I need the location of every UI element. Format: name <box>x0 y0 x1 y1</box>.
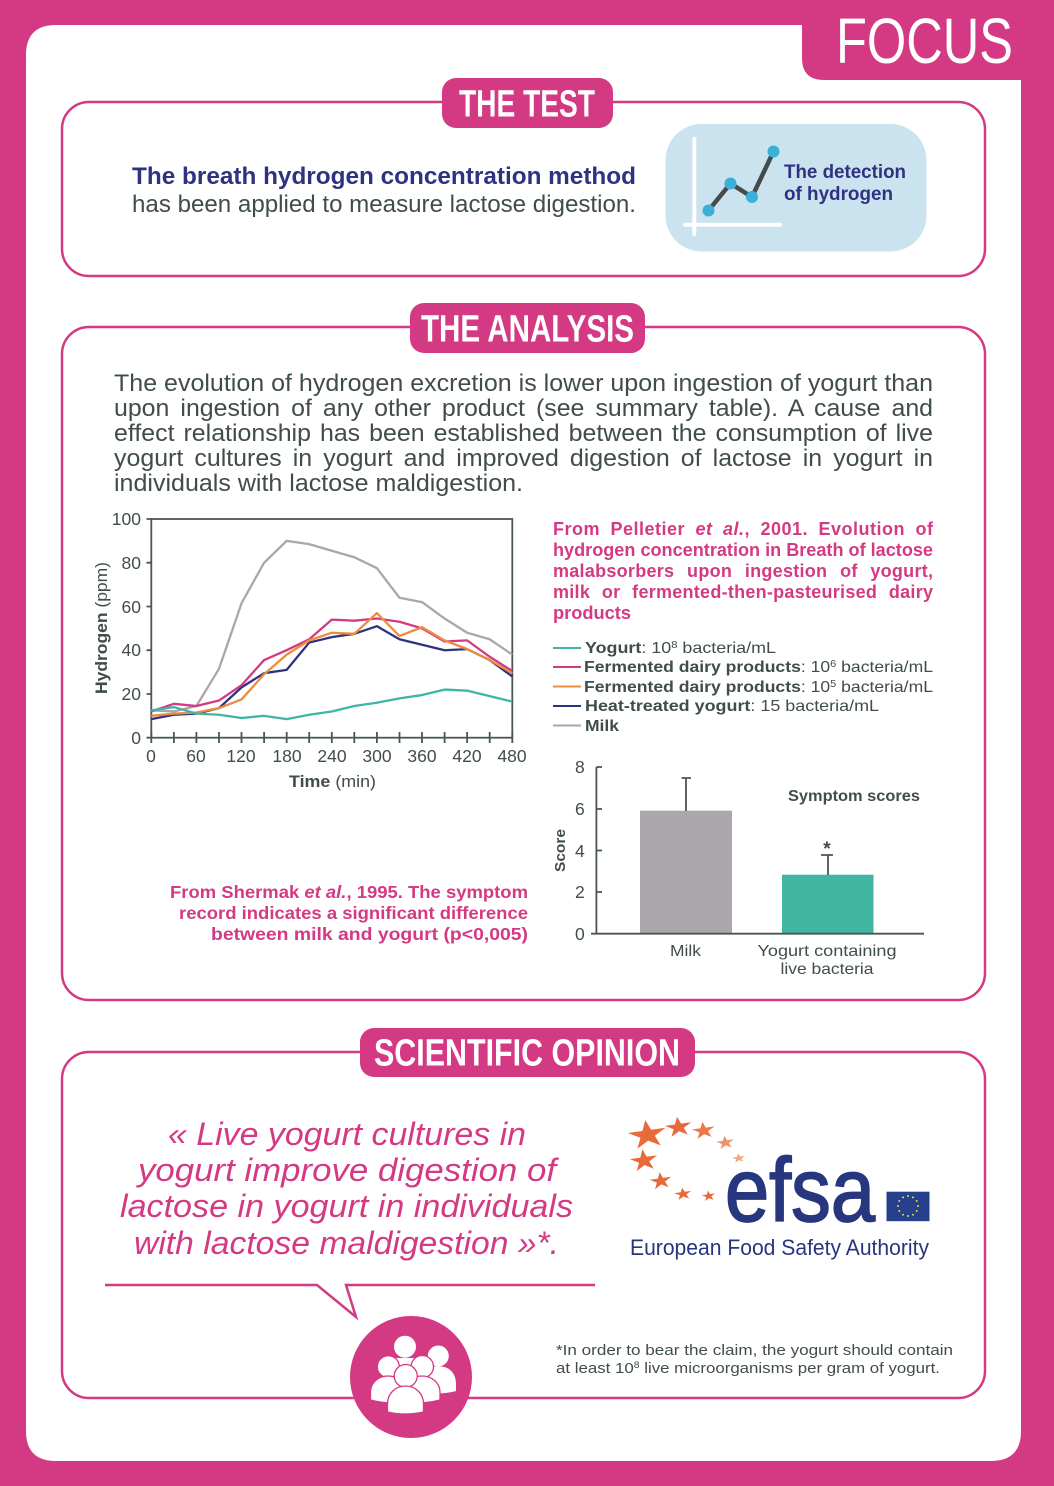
bar chart: symptom scores <box>552 757 924 978</box>
legend: line chart series <box>553 640 933 735</box>
logo: efsa: European Food Safety Authority <box>630 1235 929 1260</box>
text: Pelletier citation <box>553 519 934 623</box>
text: method description: has been applied to measure lactose digestion. <box>132 191 636 218</box>
line chart: hydrogen over time: 360 <box>407 746 437 766</box>
logo stars <box>626 1115 746 1201</box>
text: footnote: *In order to bear the claim, the yogurt should contain <box>556 1343 953 1359</box>
focus tab: FOCUS <box>836 5 1013 77</box>
line chart: hydrogen over time: 60 <box>122 597 141 617</box>
panel: the test <box>62 78 985 276</box>
line chart: hydrogen over time: 20 <box>122 684 141 704</box>
legend: line chart series: Milk <box>585 718 619 735</box>
text: analysis paragraph: yogurt cultures in yogurt and improved digestion of lactose in yogurt in <box>114 445 933 472</box>
heading: the analysis <box>410 303 645 353</box>
icon: detection of hydrogen chart badge: of hydrogen <box>784 183 893 205</box>
line chart: hydrogen over time: 480 <box>497 746 527 766</box>
text: quote <box>120 1116 573 1261</box>
icon: detection of hydrogen chart badge: The detection <box>784 161 906 183</box>
bar chart: symptom scores: 2 <box>575 882 585 902</box>
text: analysis paragraph: individuals with lactose maldigestion. <box>114 470 523 497</box>
line chart: hydrogen over time: 300 <box>362 746 392 766</box>
speech bubble line <box>105 1285 595 1317</box>
text: quote: yogurt improve digestion of <box>136 1152 559 1188</box>
text: quote: « Live yogurt cultures in <box>168 1116 526 1152</box>
legend: line chart series: bacteria/mL <box>836 659 933 676</box>
panel: the analysis <box>62 303 985 1000</box>
legend: line chart series: Heat-treated yogurt : 15 bacteria/mL <box>585 698 879 715</box>
line chart: hydrogen over time: 60 <box>186 746 206 766</box>
heading: the analysis: THE ANALYSIS <box>421 308 634 350</box>
line chart: hydrogen over time: 80 <box>122 553 141 573</box>
panel: scientific opinion <box>62 1028 985 1438</box>
bar chart: symptom scores: 4 <box>575 841 585 861</box>
bar chart: symptom scores: Yogurt containing <box>758 943 896 960</box>
logo: efsa <box>626 1115 930 1260</box>
bar chart: symptom scores: live bacteria <box>780 961 874 978</box>
line chart: hydrogen over time: Time (min) <box>289 773 376 791</box>
text: footnote <box>556 1343 953 1377</box>
line chart: hydrogen over time: 120 <box>226 746 256 766</box>
logo: EU flag <box>886 1192 930 1221</box>
bar chart: symptom scores: Score <box>552 829 569 872</box>
bar chart: symptom scores: Symptom scores <box>788 788 920 805</box>
text: Shermak citation: between milk and yogurt (p<0,005) <box>211 924 528 944</box>
text: Shermak citation <box>170 882 528 944</box>
text: Shermak citation: record indicates a significant difference <box>179 903 528 923</box>
text: footnote: at least 10 <box>556 1361 623 1377</box>
legend: line chart series: 5 <box>830 679 837 690</box>
legend: line chart series: Yogurt : 10 <box>585 640 668 657</box>
bar chart: symptom scores: * <box>823 839 831 860</box>
legend: line chart series: 8 <box>671 640 678 651</box>
text: Pelletier citation: hydrogen concentration in Breath of lactose <box>553 540 933 560</box>
legend: line chart series: bacteria/mL <box>677 640 776 657</box>
heading: scientific opinion: SCIENTIFIC OPINION <box>374 1032 680 1074</box>
text: Pelletier citation: milk or fermented-then-pasteurised dairy <box>553 582 933 602</box>
legend: line chart series: bacteria/mL <box>836 679 933 696</box>
line chart: hydrogen over time: Hydrogen (ppm) <box>93 562 111 694</box>
line chart: hydrogen over time: 0 <box>131 728 141 748</box>
legend: line chart series: Fermented dairy products : 10 <box>584 679 828 696</box>
text: Shermak citation: From Shermak et al., 1995. The symptom <box>170 882 528 902</box>
text: Pelletier citation: products <box>553 603 631 623</box>
line chart: hydrogen over time: 180 <box>272 746 302 766</box>
text: method description: The breath hydrogen concentration method <box>132 163 636 190</box>
text: quote: with lactose maldigestion »*. <box>134 1225 559 1261</box>
line chart: hydrogen over time: 100 <box>112 509 141 529</box>
text: quote: lactose in yogurt in individuals <box>120 1188 573 1224</box>
logo: efsa: efsa <box>725 1141 876 1241</box>
line chart: hydrogen over time: 40 <box>122 640 141 660</box>
heading: the test <box>442 78 613 128</box>
bar chart: symptom scores: Milk <box>670 943 702 960</box>
bar chart: symptom scores: 0 <box>575 924 585 944</box>
icon: group of people <box>350 1316 472 1438</box>
text: analysis paragraph <box>114 370 933 497</box>
heading: the test: THE TEST <box>459 84 595 126</box>
bar chart: symptom scores: 6 <box>575 799 585 819</box>
text: analysis paragraph: The evolution of hydrogen excretion is lower upon ingestion of yogurt than <box>114 370 933 397</box>
text: footnote: live microorganisms per gram of yogurt. <box>640 1361 940 1377</box>
legend: line chart series: 6 <box>830 659 837 670</box>
text: method description <box>132 163 636 218</box>
bar chart: symptom scores: 8 <box>575 757 585 777</box>
legend: line chart series: Fermented dairy products : 10 <box>584 659 828 676</box>
line chart: hydrogen over time: 240 <box>317 746 347 766</box>
line chart: hydrogen over time: 0 <box>146 746 156 766</box>
text: analysis paragraph: effect relationship has been established between the consumption of live <box>114 420 933 447</box>
line chart: hydrogen over time: 420 <box>452 746 482 766</box>
text: analysis paragraph: upon ingestion of any other product (see summary table). A cause and <box>114 395 933 422</box>
text: Pelletier citation: From Pelletier et al., 2001. Evolution of <box>553 519 934 539</box>
text: footnote: 8 <box>634 1360 640 1370</box>
text: Pelletier citation: malabsorbers upon ingestion of yogurt, <box>553 561 933 581</box>
icon: detection of hydrogen chart badge <box>666 124 926 252</box>
line chart: hydrogen over time <box>93 509 527 791</box>
